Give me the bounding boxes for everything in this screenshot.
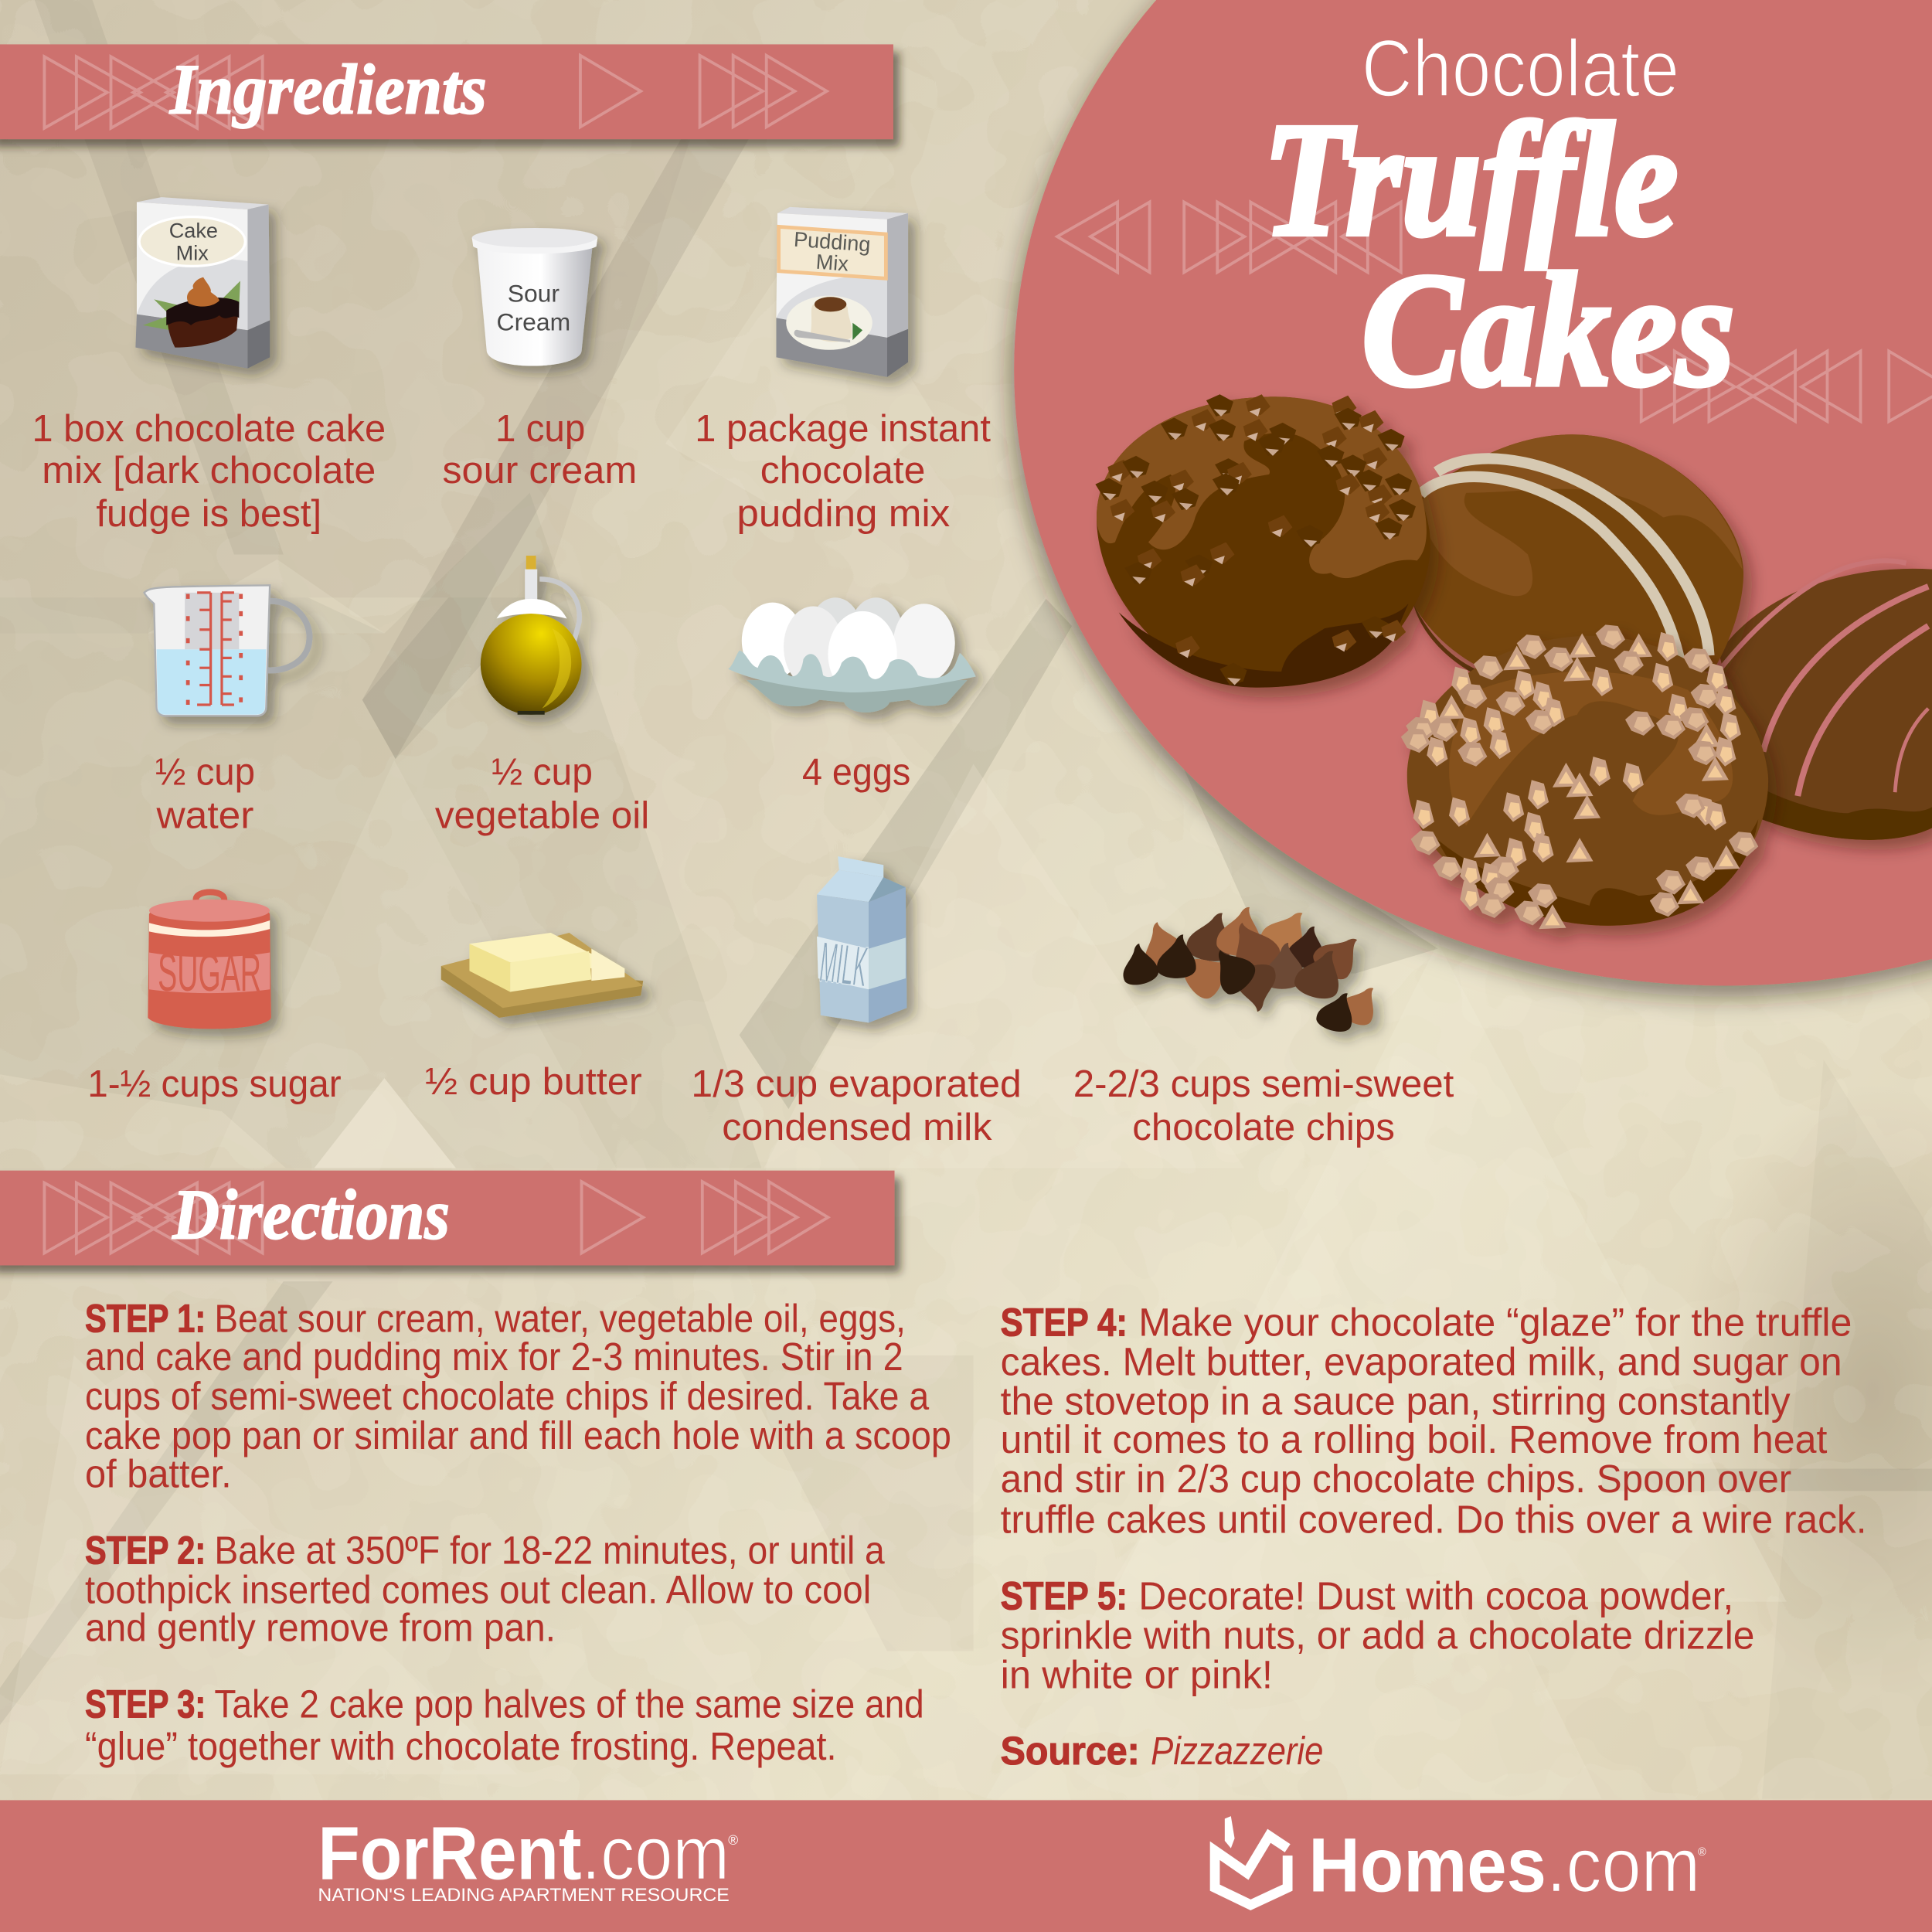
text block: ingredient labels: 4 eggs (802, 751, 910, 794)
text block: steps 1 to 3 (85, 1297, 951, 1768)
text block: ingredient labels: mix [dark chocolate (42, 449, 376, 492)
text block: steps 1 to 3: toothpick inserted comes out clean. Allow to cool (85, 1567, 871, 1611)
truffle: pink drizzle (1716, 560, 1932, 840)
text block: steps 4 and 5 with source: Decorate! Dust with cocoa powder, (1138, 1573, 1733, 1617)
text block: steps 4 and 5 with source: Source: (1001, 1729, 1140, 1773)
icon: cake mix box: Cake (169, 219, 218, 243)
logo: ForRent.com: ForRent (318, 1811, 582, 1895)
text block: ingredient labels: 1 package instant (695, 407, 991, 450)
panel: title circle (1014, 0, 1932, 986)
text block: steps 4 and 5 with source: STEP 4: (1001, 1300, 1128, 1344)
text block: steps 4 and 5 with source: and stir in 2/3 cup chocolate chips. Spoon over (1001, 1457, 1791, 1501)
illustration: truffles (1095, 394, 1932, 929)
text block: ingredient labels: sour cream (442, 449, 637, 492)
text block: steps 4 and 5 with source: cakes. Melt butter, evaporated milk, and sugar on (1001, 1339, 1842, 1383)
icon: oil bottle (481, 556, 582, 715)
icon: milk carton (817, 856, 906, 1022)
text block: ingredient labels: chocolate chips (1132, 1106, 1395, 1148)
text block: steps 1 to 3: cups of semi-sweet chocolate chips if desired. Take a (85, 1374, 930, 1418)
text block: steps 4 and 5 with source: in white or pink! (1001, 1652, 1273, 1696)
text block: ingredient labels: 1-½ cups sugar (87, 1063, 342, 1105)
text block: ingredient labels: 1 box chocolate cake (32, 407, 386, 450)
text block: steps 4 and 5 with source: Pizzazzerie (1151, 1729, 1323, 1773)
logo: ForRent.com: ® (728, 1832, 738, 1848)
icon: sugar jar: SUGAR (158, 943, 261, 1002)
title: Cakes: Cakes (1362, 239, 1735, 420)
logo: ForRent.com: .com (582, 1811, 730, 1895)
text block: steps 1 to 3: “glue” together with chocolate frosting. Repeat. (85, 1724, 837, 1768)
text block: steps 1 to 3: cake pop pan or similar and fill each hole with a scoop (85, 1413, 951, 1458)
truffle: front with nuts (1401, 624, 1768, 929)
text block: steps 1 to 3: Take 2 cake pop halves of the same size and (214, 1682, 924, 1726)
icon: pudding mix box (776, 207, 908, 377)
icon: eggs (728, 597, 976, 713)
text block: steps 1 to 3: Bake at 350ºF for 18-22 minutes, or until a (214, 1528, 885, 1572)
text block: ingredient labels: condensed milk (722, 1106, 992, 1148)
text block: steps 1 to 3: and cake and pudding mix for 2-3 minutes. Stir in 2 (85, 1335, 903, 1379)
text block: ingredient labels: 2-2/3 cups semi-sweet (1073, 1063, 1454, 1105)
banner triangles (44, 56, 827, 128)
logo: Homes.com: Homes (1308, 1822, 1546, 1907)
logo: Homes.com (1215, 1816, 1706, 1907)
icon: measuring jug (145, 585, 310, 716)
text block: steps 4 and 5 with source: sprinkle with nuts, or add a chocolate drizzle (1001, 1613, 1754, 1657)
icon: milk carton: MILK (817, 930, 871, 998)
text block: ingredient labels: ½ cup (155, 751, 255, 794)
icon: pudding mix box: Pudding (793, 227, 872, 257)
truffle: white drizzle (1400, 434, 1743, 684)
text block: ingredient labels: ½ cup (492, 751, 593, 794)
circle triangle decorations (1057, 202, 1932, 421)
text block: steps 4 and 5 with source: STEP 5: (1001, 1573, 1128, 1617)
text block: ingredient labels: 1/3 cup evaporated (691, 1063, 1022, 1105)
text block: ingredient labels: water (155, 794, 253, 836)
icon: cake mix box: Mix (176, 240, 209, 264)
title: Chocolate: Chocolate (1362, 23, 1679, 114)
text block: ingredient labels: fudge is best] (96, 492, 321, 535)
text block: ingredient labels: vegetable oil (435, 794, 649, 836)
text block: ingredient labels: 1 cup (495, 407, 585, 450)
text block: ingredient labels: chocolate (760, 449, 925, 492)
icon: sour cream cup: Sour (508, 280, 560, 308)
text block: steps 1 to 3: STEP 3: (85, 1682, 206, 1726)
text block: steps 1 to 3: and gently remove from pan. (85, 1606, 556, 1650)
heading: Ingredients: Ingredients (169, 51, 487, 130)
text block: steps 1 to 3: Beat sour cream, water, vegetable oil, eggs, (214, 1297, 906, 1341)
icon: sour cream cup: Cream (497, 308, 570, 335)
icon: pudding mix box: Mix (815, 250, 849, 276)
icon: cake mix box (135, 197, 270, 369)
icon: sugar jar (148, 892, 271, 1029)
text block: ingredient labels (32, 407, 1454, 1148)
text block: steps 4 and 5 with source (1001, 1300, 1866, 1773)
text block: steps 4 and 5 with source: until it comes to a rolling boil. Remove from heat (1001, 1417, 1827, 1461)
logo: ForRent.com: NATION'S LEADING APARTMENT RESOURCE (318, 1885, 730, 1906)
banner triangles (44, 1182, 828, 1253)
text block: steps 1 to 3: STEP 1: (85, 1297, 206, 1341)
icon: butter (441, 933, 643, 1018)
title: Truffle: Truffle (1263, 89, 1679, 270)
icon: chocolate chips (1118, 900, 1386, 1036)
banner: Ingredients (0, 44, 893, 139)
text block: steps 4 and 5 with source: truffle cakes until covered. Do this over a wire rack. (1001, 1497, 1866, 1541)
text block: steps 1 to 3: of batter. (85, 1451, 232, 1495)
text block: ingredient labels: ½ cup butter (425, 1060, 642, 1103)
text block: steps 1 to 3: STEP 2: (85, 1528, 206, 1572)
icon: sour cream cup (472, 228, 597, 366)
logo: Homes.com: .com (1546, 1822, 1700, 1907)
text block: steps 4 and 5 with source: the stovetop in a sauce pan, stirring constantly (1001, 1379, 1791, 1423)
banner: Directions (0, 1171, 895, 1265)
text block: steps 4 and 5 with source: Make your chocolate “glaze” for the truffle (1138, 1300, 1852, 1344)
logo: Homes.com: ® (1698, 1846, 1706, 1859)
footer bar (0, 1800, 1932, 1932)
truffle: dark with nuts (1095, 394, 1430, 688)
logo: ForRent.com (318, 1811, 738, 1906)
heading: Directions: Directions (172, 1175, 450, 1254)
text block: ingredient labels: pudding mix (736, 492, 951, 535)
